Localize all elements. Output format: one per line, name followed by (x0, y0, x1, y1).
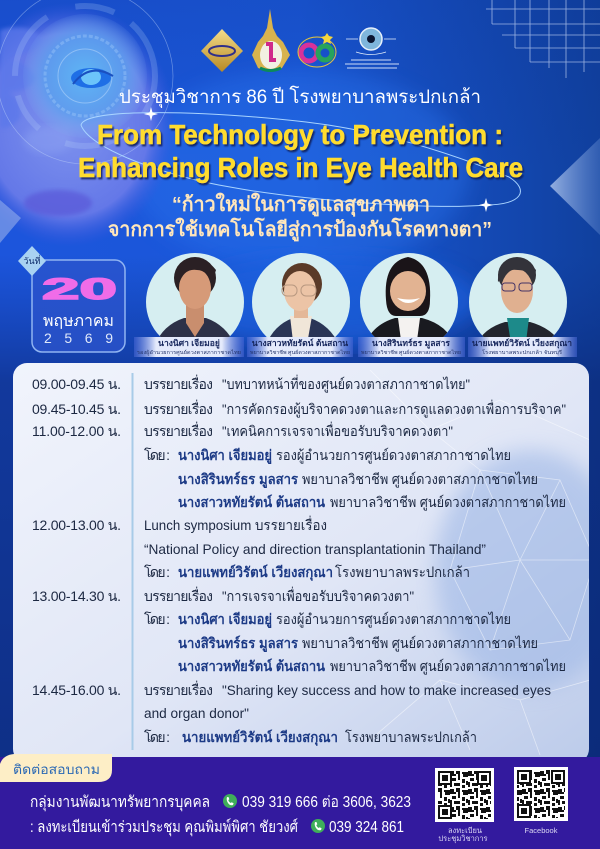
thai subtitle: “ก้าวใหม่ในการดูแลสุขภาพตา (172, 192, 430, 218)
logo: eye center (345, 28, 399, 68)
row 12.00 (32, 516, 486, 581)
speakers group 2: พยาบาลวิชาชีพ ศูนย์ดวงตาสภากาชาดไทย (302, 635, 538, 652)
speaker 1 (146, 253, 244, 340)
row 14.45: นายแพทย์วิรัตน์ เวียงสกุณา (182, 729, 338, 746)
contact line 2: 039 324 861 (329, 819, 404, 836)
row 14.45 (32, 681, 551, 746)
diamond: day label: วันที่ (23, 254, 41, 266)
QR code: registration: ประชุมวิชาการ (438, 834, 488, 843)
network artwork (370, 370, 600, 755)
row 14.45: โรงพยาบาลพระปกเกล้า (345, 729, 477, 745)
speaker 2 (252, 253, 350, 337)
row 09.00 (32, 375, 470, 393)
speakers group 1: นางสาวหทัยรัตน์ ต้นสถาน (178, 494, 325, 510)
name band 4 (468, 337, 577, 357)
logo: spire crest (252, 9, 290, 72)
contact tab: ติดต่อสอบถาม (13, 762, 100, 777)
speakers group 1: โดย : (144, 447, 170, 463)
row 12.00: 12.00-13.00 น. (32, 517, 121, 533)
decorative diamonds (0, 138, 600, 243)
row 14.45: and organ donor" (144, 705, 249, 721)
name band 3: พยาบาลวิชาชีพ ศูนย์ดวงตาสภากาชาดไทย (361, 349, 461, 356)
thai subtitle (108, 192, 492, 243)
speakers group 1: พยาบาลวิชาชีพ ศูนย์ดวงตาสภากาชาดไทย (302, 471, 538, 488)
logo: 86 anniversary (298, 33, 336, 67)
name band 3: นางสิรินทร์ธร มูลสาร (372, 338, 450, 349)
speakers group 2: นางสาวหทัยรัตน์ ต้นสถาน (178, 658, 325, 674)
row 09.45: 09.45-10.45 น. (32, 401, 121, 417)
row 13.00: 13.00-14.30 น. (32, 588, 121, 604)
row 09.45: บรรยายเรื่อง (144, 400, 213, 417)
QR code: facebook: Facebook (525, 826, 558, 835)
QR code: registration: ลงทะเบียน (448, 826, 482, 835)
icon: phone (223, 794, 237, 808)
speakers group 2: รองผู้อำนวยการศูนย์ดวงตาสภากาชาดไทย (276, 611, 511, 628)
row 09.45: "การคัดกรองผู้บริจาคดวงตาและการดูแลดวงตาเพื่อการบริจาค" (222, 400, 566, 418)
speaker 4 (469, 253, 567, 339)
row 09.45 (32, 400, 566, 418)
name band 2: พยาบาลวิชาชีพ ศูนย์ดวงตาสภากาชาดไทย (250, 349, 350, 356)
name band 4: นายแพทย์วิรัตน์ เวียงสกุณา (472, 338, 572, 349)
event heading: ประชุมวิชาการ 86 ปี โรงพยาบาลพระปกเกล้า (119, 85, 481, 109)
row 09.00: "บทบาทหน้าที่ของศูนย์ดวงตาสภากาชาดไทย" (222, 375, 470, 393)
speakers group 2: โดย : (144, 611, 170, 627)
date badge: 2 5 6 9 (44, 330, 113, 346)
face and eye artwork (0, 0, 176, 247)
decorative grid top right (486, 0, 600, 78)
name band 1: นางนิศา เจียมอยู่ (158, 338, 220, 349)
logos (201, 9, 399, 72)
contact line 1: 039 319 666 ต่อ 3606, 3623 (242, 794, 411, 811)
speakers group 1: นางนิศา เจียมอยู่ (178, 447, 272, 464)
row 09.00: 09.00-09.45 น. (32, 376, 121, 392)
name band 2 (247, 337, 353, 357)
row 13.00: บรรยายเรื่อง (144, 587, 213, 604)
name band 4: โรงพยาบาลพระปกเกล้า จันทบุรี (482, 349, 562, 356)
footer band (0, 757, 600, 849)
name band 3 (358, 337, 465, 357)
row 13.00: "การเจรจาเพื่อขอรับบริจาคดวงตา" (222, 587, 414, 604)
logo: gold diamond emblem (201, 29, 243, 72)
date badge: 20 (42, 273, 117, 306)
speaker name bands (134, 337, 577, 357)
row 14.45: "Sharing key success and how to make increased eyes (222, 682, 551, 698)
QR code: facebook (514, 767, 568, 835)
icon: phone (311, 819, 325, 833)
row 13.00 (32, 587, 414, 604)
contact line 1: กลุ่มงานพัฒนาทรัพยากรบุคคล (30, 794, 210, 812)
speakers group 2: พยาบาลวิชาชีพ ศูนย์ดวงตาสภากาชาดไทย (330, 658, 566, 675)
main title (78, 119, 523, 183)
row 11.00 (32, 422, 453, 439)
speakers group 2 (144, 611, 566, 675)
panel: schedule (13, 363, 600, 763)
name band 1 (134, 337, 244, 357)
speakers group 1: รองผู้อำนวยการศูนย์ดวงตาสภากาชาดไทย (276, 447, 511, 464)
orbit ring with sparkles (81, 107, 520, 212)
speakers group 1: นางสิรินทร์ธร มูลสาร (178, 471, 298, 488)
row 09.00: บรรยายเรื่อง (144, 375, 213, 392)
row 12.00: โรงพยาบาลพระปกเกล้า (335, 564, 470, 580)
date badge (18, 246, 125, 352)
row 14.45: โดย : (144, 729, 170, 745)
contact line 1 (30, 794, 411, 812)
row 11.00: "เทคนิคการเจรจาเพื่อขอรับบริจาคดวงตา" (222, 422, 453, 439)
row 12.00: โดย : (144, 564, 170, 580)
main title: From Technology to Prevention : (97, 119, 503, 150)
name band 1: รองผู้อำนวยการศูนย์ดวงตาสภากาชาดไทย (137, 349, 241, 356)
speakers group 2: นางสิรินทร์ธร มูลสาร (178, 635, 298, 652)
divider (132, 373, 134, 750)
thai subtitle: จากการใช้เทคโนโลยีสู่การป้องกันโรคทางตา” (108, 217, 492, 243)
row 12.00: “National Policy and direction transplantationin Thailand” (144, 541, 486, 557)
contact tab (0, 754, 112, 782)
row 12.00: นายแพทย์วิรัตน์ เวียงสกุณา (178, 564, 333, 581)
speakers group 1: พยาบาลวิชาชีพ ศูนย์ดวงตาสภากาชาดไทย (330, 494, 566, 511)
contact line 2: : ลงทะเบียนเข้าร่วมประชุม คุณพิมพ์พิศา ชัยวงศ์ (30, 818, 298, 837)
row 12.00: Lunch symposium บรรยายเรื่อง (144, 516, 327, 533)
QR code: registration (435, 768, 494, 843)
name band 2: นางสาวหทัยรัตน์ ต้นสถาน (252, 338, 348, 348)
speakers group 1 (144, 447, 566, 511)
row 11.00: บรรยายเรื่อง (144, 422, 213, 439)
date badge: พฤษภาคม (43, 313, 114, 330)
speaker 3 (360, 253, 458, 338)
main title: Enhancing Roles in Eye Health Care (78, 152, 523, 183)
row 14.45: 14.45-16.00 น. (32, 682, 121, 698)
row 14.45: บรรยายเรื่อง (144, 681, 213, 698)
speakers group 2: นางนิศา เจียมอยู่ (178, 611, 272, 628)
row 11.00: 11.00-12.00 น. (32, 423, 121, 439)
